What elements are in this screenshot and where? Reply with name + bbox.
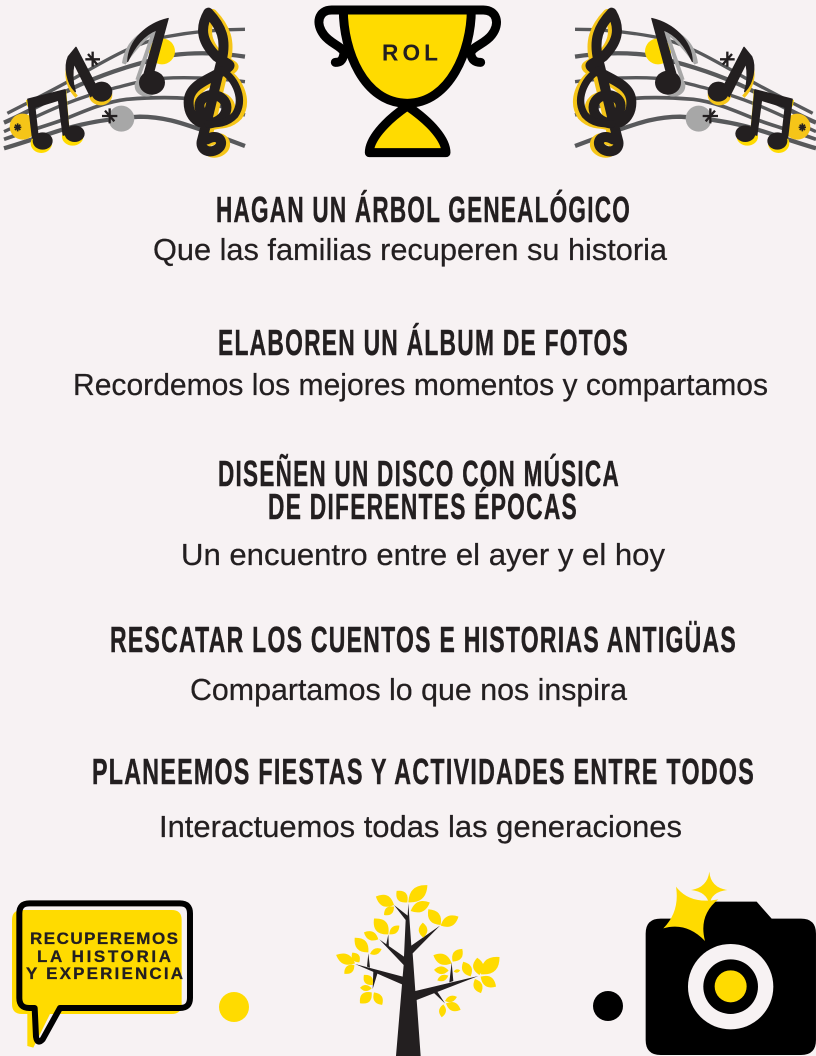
icon: tree: [334, 880, 504, 1056]
text block 1: Que las familias recuperen su historia: [153, 232, 668, 267]
callout: speech bubble: LA HISTORIA: [37, 947, 171, 966]
beamed note: [27, 90, 85, 153]
text block 4: Compartamos lo que nos inspira: [190, 672, 628, 707]
text block 4: [110, 619, 737, 707]
text block 2: Recordemos los mejores momentos y compartamos: [73, 367, 768, 402]
asterisks: [14, 52, 117, 131]
black dot: [593, 991, 623, 1021]
text block 3: Un encuentro entre el ayer y el hoy: [181, 537, 665, 572]
yellow dot: [219, 992, 249, 1022]
text block 5: [92, 751, 755, 844]
trophy label: ROL: [382, 40, 438, 66]
text block 3: DE DIFERENTES ÉPOCAS: [268, 486, 578, 527]
text block 1: [153, 188, 668, 267]
icon: music notes left: [4, 13, 245, 153]
treble clef: [189, 13, 243, 153]
single note: [66, 47, 112, 105]
text block 5: Interactuemos todas las generaciones: [159, 809, 682, 844]
text block 2: [73, 322, 768, 402]
icon: music notes right: [575, 13, 816, 153]
callout: speech bubble: [12, 903, 190, 1048]
callout: speech bubble: Y EXPERIENCIA: [26, 964, 183, 983]
icon: trophy: [319, 10, 496, 153]
callout: speech bubble: RECUPEREMOS: [30, 929, 178, 948]
icon: camera: [646, 872, 816, 1055]
text block 3: [181, 452, 665, 572]
grey note: [124, 18, 168, 97]
